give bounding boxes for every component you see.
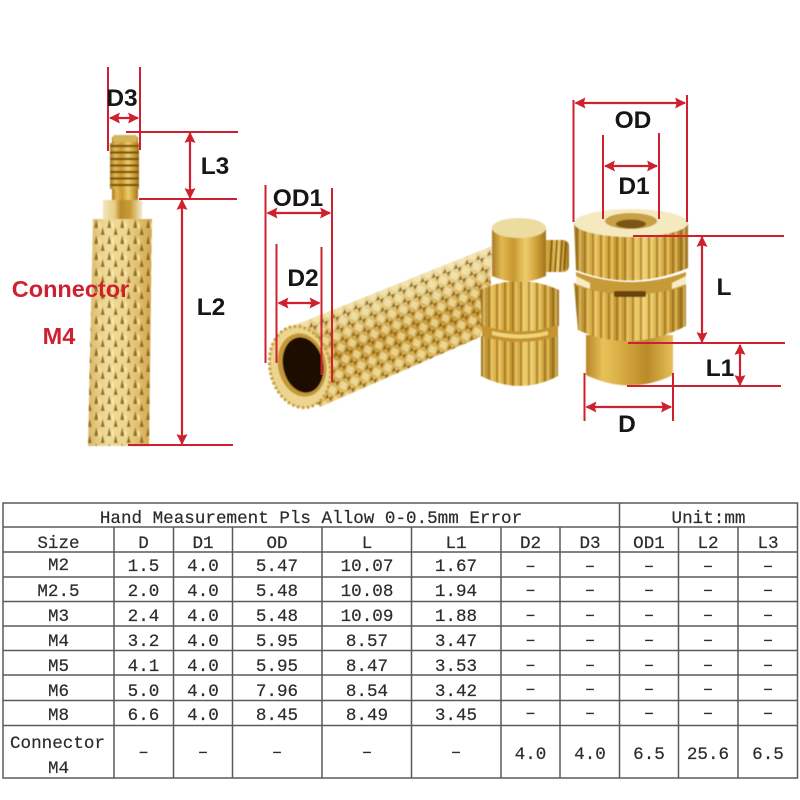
row M3: – xyxy=(525,606,536,626)
label: Connector M4: Connector xyxy=(12,276,129,302)
row M3: 1.88 xyxy=(435,607,477,627)
photo: long knurled tube and head xyxy=(262,218,569,413)
row M2: 5.47 xyxy=(256,557,298,577)
row M5: 4.1 xyxy=(128,657,159,677)
dimension lines: connector xyxy=(108,67,238,445)
row M3: 10.09 xyxy=(341,607,393,627)
table header row: D xyxy=(138,534,149,554)
row M2.5: 4.0 xyxy=(187,582,219,602)
row M4: M4 xyxy=(48,632,69,652)
row M8: 8.49 xyxy=(346,706,388,726)
label: D2: D2 xyxy=(287,265,319,292)
row M4: 5.95 xyxy=(256,632,298,652)
table title row xyxy=(100,509,745,529)
row M5: 4.0 xyxy=(187,657,219,677)
photo: M4 connector xyxy=(88,135,152,446)
row M2: – xyxy=(703,557,713,577)
row M8: 6.6 xyxy=(128,706,159,726)
row M4 xyxy=(48,631,773,652)
row M2: – xyxy=(525,557,536,577)
row M5: – xyxy=(703,656,713,676)
row M4: – xyxy=(703,631,713,651)
row M5: – xyxy=(763,656,773,676)
label: D: D xyxy=(618,411,636,438)
row M3: 2.4 xyxy=(128,607,159,627)
row M2.5: – xyxy=(585,581,595,601)
row M5: 8.47 xyxy=(346,657,388,677)
label: L2: L2 xyxy=(197,294,225,321)
row M3: – xyxy=(585,606,595,626)
label: L3: L3 xyxy=(201,153,229,180)
row Connector M4: – xyxy=(451,743,461,763)
specification table xyxy=(3,503,798,779)
row M5: – xyxy=(644,656,654,676)
row M4: – xyxy=(644,631,654,651)
row Connector M4: – xyxy=(138,743,149,763)
row M8: M8 xyxy=(48,706,69,726)
row M2.5: 2.0 xyxy=(128,582,159,602)
table header row: L2 xyxy=(697,534,719,554)
row M2.5: 5.48 xyxy=(256,582,298,602)
row M6: 8.54 xyxy=(346,682,388,702)
row M6: 5.0 xyxy=(128,682,159,702)
row M3: M3 xyxy=(48,607,69,627)
table header row: Size xyxy=(37,534,80,554)
label: OD: OD xyxy=(615,107,651,134)
row M2: – xyxy=(585,557,595,577)
row M2.5: 1.94 xyxy=(435,582,477,602)
row M6: – xyxy=(703,680,713,700)
row M3: – xyxy=(644,606,654,626)
tube knurled body xyxy=(283,246,492,407)
row Connector M4: Connector xyxy=(10,734,105,754)
table header row: L xyxy=(362,534,372,554)
upper knurl xyxy=(574,223,688,281)
row M3: – xyxy=(703,606,713,626)
row M3: – xyxy=(763,606,773,626)
row M6: – xyxy=(525,680,536,700)
row M2.5: – xyxy=(703,581,713,601)
connector neck xyxy=(103,200,142,221)
label: D1: D1 xyxy=(618,173,650,200)
row M2.5: – xyxy=(644,581,654,601)
label: L: L xyxy=(717,274,732,301)
row M2.5: – xyxy=(525,581,536,601)
row M6: – xyxy=(644,680,654,700)
top face and hole xyxy=(574,209,688,237)
row M2 xyxy=(48,556,773,577)
table title row: Unit:mm xyxy=(672,509,745,529)
row M8: – xyxy=(703,704,713,724)
row Connector M4: M4 xyxy=(48,759,69,779)
table header row xyxy=(37,534,779,554)
table title row: Hand Measurement Pls Allow 0-0.5mm Error xyxy=(100,509,522,529)
row M6: 7.96 xyxy=(256,682,298,702)
row M2: – xyxy=(763,557,773,577)
row M8 xyxy=(48,704,773,726)
label: L1: L1 xyxy=(706,355,734,382)
row M2: 1.67 xyxy=(435,557,477,577)
row M8: – xyxy=(525,704,536,724)
row M8: – xyxy=(644,704,654,724)
photo: flanged knurled insert xyxy=(574,209,688,386)
row Connector M4: – xyxy=(272,743,282,763)
label: Connector M4 xyxy=(12,276,129,349)
row M8: – xyxy=(585,704,595,724)
row Connector M4: 6.5 xyxy=(633,745,665,765)
row M6: – xyxy=(585,680,595,700)
row Connector M4: – xyxy=(362,743,372,763)
row M2.5: M2.5 xyxy=(37,582,80,602)
row M4: 3.47 xyxy=(435,632,477,652)
row M5: 3.53 xyxy=(435,657,477,677)
row M6: M6 xyxy=(48,682,69,702)
connector knurled body xyxy=(88,219,152,446)
row M2: M2 xyxy=(48,556,69,576)
table header row: D3 xyxy=(579,534,601,554)
row M5: M5 xyxy=(48,657,69,677)
row M2: – xyxy=(644,557,654,577)
connector thread xyxy=(110,135,139,200)
row Connector M4: 4.0 xyxy=(515,745,546,765)
row M2.5: 10.08 xyxy=(341,582,393,602)
row M4: 3.2 xyxy=(128,632,159,652)
row M4: – xyxy=(585,631,595,651)
row Connector M4 xyxy=(10,734,784,779)
row Connector M4: – xyxy=(198,743,208,763)
thread behind head xyxy=(538,240,569,272)
row M2: 4.0 xyxy=(187,557,219,577)
row M8: 3.45 xyxy=(435,706,477,726)
row M6: 4.0 xyxy=(187,682,219,702)
row M3 xyxy=(48,606,773,627)
smooth shank xyxy=(586,335,673,386)
knurled head xyxy=(480,281,559,386)
row M2.5 xyxy=(37,581,773,602)
row Connector M4: 4.0 xyxy=(574,745,606,765)
table header row: OD xyxy=(266,534,288,554)
label: Connector M4: M4 xyxy=(43,323,75,349)
lower knurl xyxy=(574,283,686,341)
row M8: 4.0 xyxy=(187,706,219,726)
row M8: – xyxy=(763,704,773,724)
groove xyxy=(576,272,686,294)
table header row: D1 xyxy=(192,534,214,554)
table header row: L1 xyxy=(445,534,467,554)
row M6: – xyxy=(763,680,773,700)
row Connector M4: 25.6 xyxy=(687,745,729,765)
row M6 xyxy=(48,680,773,702)
dimension lines: insert xyxy=(574,95,785,421)
row M5 xyxy=(48,656,773,677)
row M8: 8.45 xyxy=(256,706,298,726)
row M2: 10.07 xyxy=(341,557,393,577)
row M4: 4.0 xyxy=(187,632,219,652)
label: OD1: OD1 xyxy=(273,185,323,212)
row M5: 5.95 xyxy=(256,657,298,677)
row M3: 4.0 xyxy=(187,607,219,627)
row M2.5: – xyxy=(763,581,773,601)
tube end face xyxy=(262,321,338,413)
label: D3: D3 xyxy=(106,85,138,112)
row M4: – xyxy=(525,631,536,651)
table header row: OD1 xyxy=(633,534,665,554)
dimension lines: tube xyxy=(266,185,332,382)
row M6: 3.42 xyxy=(435,682,477,702)
table header row: L3 xyxy=(757,534,779,554)
table header row: D2 xyxy=(520,534,541,554)
smooth head post xyxy=(492,218,546,282)
row M5: – xyxy=(525,656,536,676)
row M4: 8.57 xyxy=(346,632,388,652)
row M5: – xyxy=(585,656,595,676)
row M2: 1.5 xyxy=(128,557,159,577)
row Connector M4: 6.5 xyxy=(752,745,784,765)
row M3: 5.48 xyxy=(256,607,298,627)
row M4: – xyxy=(763,631,773,651)
